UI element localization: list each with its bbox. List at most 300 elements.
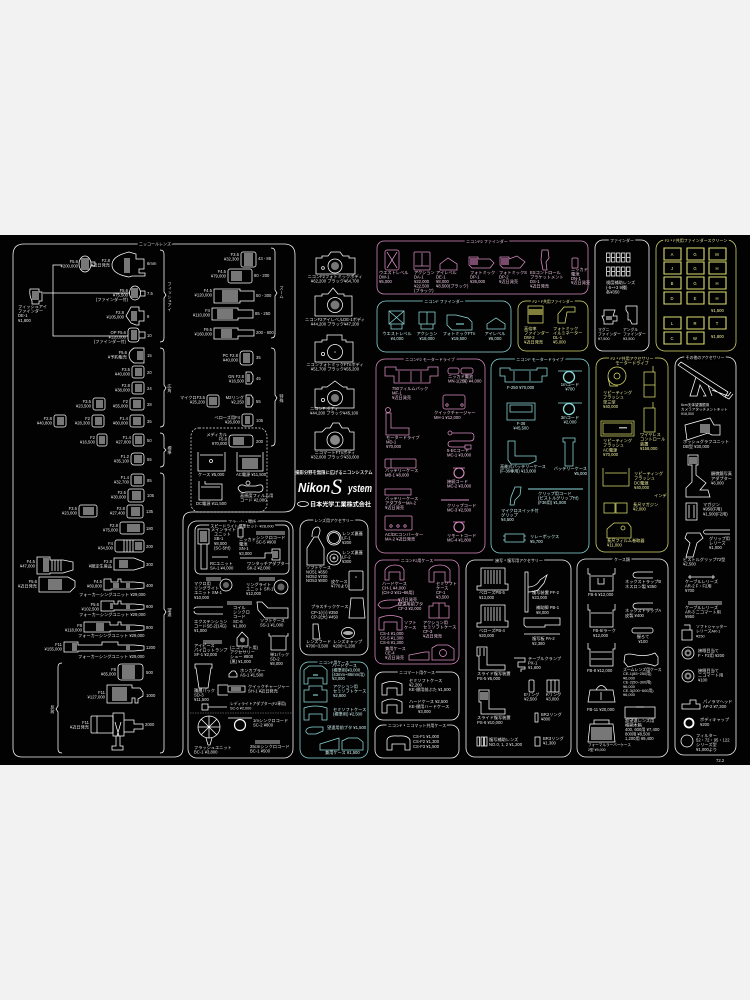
telephoto wooden case xyxy=(625,707,660,742)
battery adapter MA-2: バッテリーケース xyxy=(385,496,418,501)
screen grid: E xyxy=(694,296,697,301)
battery pack SD-3: ¥11,500 xyxy=(194,697,209,702)
lens: 300mm: ¥限定生産品 xyxy=(89,563,112,570)
hard case: ハードケース ¥2,500 xyxy=(409,699,448,704)
lens: 6mm F2.8: 6mm xyxy=(147,261,157,266)
coil sync cord: コード xyxy=(233,614,246,619)
slide copier PS-6 xyxy=(477,690,511,725)
magnifier finder xyxy=(598,310,621,341)
panel: camera bodies xyxy=(295,252,373,508)
finder photomic illuminator xyxy=(553,307,582,344)
finder DA-1: ¥22,000 xyxy=(414,279,430,284)
rear cap LF-1: LF-1 xyxy=(342,536,351,541)
relay box xyxy=(503,533,559,544)
grip cord: (F36用) ¥1,800 xyxy=(538,500,567,506)
NiCd battery xyxy=(238,528,256,556)
lens: 180mm: 180 xyxy=(146,526,154,531)
panel: flash accessories: フラッシュ関係 xyxy=(228,518,256,524)
former case: 2型 ¥9,000 xyxy=(588,747,606,752)
repeating flash AC: リピーティング xyxy=(603,438,632,443)
lens: medical 200mm: 200 xyxy=(256,439,264,444)
hard case xyxy=(382,698,449,714)
lens: 8mm F2.8: F2.8 xyxy=(116,310,124,315)
cable release AR-3: ¥950 xyxy=(685,614,695,619)
3m cord: ¥2,000 xyxy=(564,420,577,425)
screen grid: A xyxy=(671,252,674,257)
lens: 50mm F2 xyxy=(80,434,107,446)
cord MC-1 xyxy=(447,431,474,458)
panel: Nikon F2 finders xyxy=(377,238,590,294)
label index: インデ xyxy=(654,492,667,499)
K ring: Kリング xyxy=(546,692,561,697)
battery MN-1 xyxy=(448,368,482,384)
front cover CF-3: 望遠用前ブタ xyxy=(398,600,423,608)
main light unit: (SC-5付) xyxy=(214,544,231,551)
lens hood xyxy=(306,624,331,649)
lens: 6mm F2.8: F2.8 xyxy=(102,258,110,263)
lens: PC 35mm: 35 xyxy=(256,355,261,360)
quick charger MH-1: クイックチャージャー xyxy=(434,410,476,415)
NiCd battery DN-1 xyxy=(571,258,590,286)
panel: Nikon F cases: ニコンF用ケース xyxy=(319,659,349,665)
brace: fisheye group xyxy=(160,250,172,342)
lens: 85mm: F1.4 xyxy=(121,475,129,480)
soft case CS xyxy=(379,616,417,645)
camera: Nikon F2 Photomic xyxy=(308,252,362,285)
brace: special group xyxy=(271,348,284,446)
rear cap LF-2: レンズ裏蓋 xyxy=(342,550,363,555)
neck strap A: 皮製 ¥400 xyxy=(625,612,645,619)
3m cord: 3mコード xyxy=(561,415,579,420)
camera: Nikon F2 eye level: ニコンF2アイレベルDE-1ボディ xyxy=(305,317,365,322)
magazine: ¥1,500(F2用) xyxy=(703,511,728,517)
1m cord: ¥700 xyxy=(565,387,575,392)
copy board PA-2: ¥2,380 xyxy=(532,641,545,646)
lens: zoom 80-200: 80 - 200 xyxy=(254,273,270,278)
lens: 500mm reflex: 500 xyxy=(146,670,154,675)
lens: 200mm F4.5 left: ¥47,000 xyxy=(20,564,36,569)
camera: Nikomat FTn: ニコマートFTnボディ xyxy=(315,450,355,455)
battery pack SD-2: ¥8,000 xyxy=(270,661,283,666)
lens: 200mm: 200 xyxy=(146,544,154,549)
close-up lenses xyxy=(477,736,523,747)
finder DW-1: DW-1 xyxy=(379,274,390,280)
finder DA-1 xyxy=(414,252,435,294)
heading: F2・F共用アクセサリー xyxy=(611,355,653,361)
battery adapter MA-2 xyxy=(385,489,418,511)
semi soft case: セミソフトケース xyxy=(333,707,366,712)
finder eye level: ¥6,000 xyxy=(489,336,502,341)
finder DP-1: DP-1 xyxy=(470,274,480,280)
lens: 105mm xyxy=(111,489,155,502)
lens: 300mm xyxy=(89,558,154,570)
camera: Nikon F body xyxy=(310,381,359,417)
panel: zoom and special lenses xyxy=(180,248,284,512)
NiCd battery: ニッカド xyxy=(239,537,256,542)
copy stand PF-2 xyxy=(525,572,560,615)
finder DE-1: ¥8,000 xyxy=(436,279,449,284)
battery MN-1: MN-1(2個) ¥4,000 xyxy=(448,378,482,384)
rear cap LF-2: ¥300 xyxy=(342,559,352,564)
semi soft case CF-1 xyxy=(429,565,457,600)
diopter lenses grid: (-5~+3 9種) xyxy=(606,284,628,291)
NiCd battery: ¥3,000 xyxy=(239,551,252,556)
hard case: ハードケース xyxy=(332,663,357,668)
action semi soft case xyxy=(304,684,366,702)
diopter lenses grid: 視度補助レンズ xyxy=(606,280,635,285)
microscope adapter: ¥6,000 xyxy=(711,481,724,486)
screen grid: L xyxy=(671,321,674,326)
battery case: バッテリーケース xyxy=(554,466,587,471)
panel: Nikomat cases: ニコマート用ケース xyxy=(399,669,435,675)
eyepiece pilot lamp: SF-1 ¥2,000 xyxy=(194,652,218,657)
magnifier finder: ファインダー xyxy=(598,332,621,336)
action semi soft case text: セミソフトケース xyxy=(423,624,456,630)
lens: 10mm OP F5.6: (ファインダー付) xyxy=(94,338,127,345)
finder DW-1: ウエストレベル xyxy=(379,270,408,275)
finder waist level xyxy=(382,311,412,341)
control DS-1: ブラケットメント xyxy=(530,274,564,280)
table clamp xyxy=(514,655,562,672)
brace: zoom group: ズーム xyxy=(280,285,284,299)
pistol grip xyxy=(683,533,725,567)
panel: Nikon F2 finders: ニコンF2 ファインダー xyxy=(466,238,508,244)
long magazine: ¥2,000 xyxy=(633,507,646,512)
panel: focusing screens xyxy=(656,237,736,351)
copy board PA-2: 複写板 PA-2 xyxy=(532,636,555,641)
accessory shoe: (ニコマート用) xyxy=(230,645,258,650)
finder DA-1: DA-1 xyxy=(414,274,424,280)
lens: 400mm xyxy=(79,579,154,598)
BR2 ring xyxy=(535,711,562,722)
NiCd battery DN-1: DN-1 xyxy=(571,276,581,281)
soft shutter release: レリーズAR-1 xyxy=(696,629,720,634)
lens: zoom 50-300 xyxy=(195,288,272,303)
lens: 24mm: ¥38,000 xyxy=(115,388,131,393)
one touch adapter xyxy=(240,549,289,571)
cord MC-1: MC-1 ¥3,000 xyxy=(447,452,472,458)
combination case CE-4: ¥近日発売 xyxy=(385,654,404,661)
flash unit BC-1: フラッシュユニット xyxy=(194,745,232,750)
lens: medical 200mm: F5.6 xyxy=(219,437,228,442)
hand strap xyxy=(632,628,653,644)
table clamp: テーブルクランプ xyxy=(528,656,561,661)
lens: 1200mm: フォーカーシングユニット ¥29,000 xyxy=(78,653,145,660)
flash unit BC-1 xyxy=(194,716,232,755)
RC unit: SA-1 ¥4,000 xyxy=(210,566,234,571)
micro switch grip xyxy=(501,487,539,522)
lens: 400mm: 400 xyxy=(146,583,154,588)
lens: M2 ring 55mm: ¥2,250 xyxy=(231,400,245,405)
lens: 50mm F1.4: F1.4 xyxy=(123,435,131,440)
eye cup F: F・F2用 ¥200 xyxy=(698,653,725,659)
camera: Nikon Photomic FTn: ¥51,700 ブラック¥55,200 xyxy=(311,366,360,373)
soft case CS: CS-4 ¥1,000 xyxy=(380,631,404,636)
accessory shoe xyxy=(230,632,259,665)
panorama head: パノラマヘッド xyxy=(703,699,732,704)
ready light adapter: SC-6 ¥2,000 xyxy=(230,707,251,711)
extension cord: エクステンション xyxy=(194,619,227,624)
lens: 15mm xyxy=(108,348,152,363)
BR3 ring: BR3リング xyxy=(543,736,564,741)
lens: 35mm F1.4: F1.4 xyxy=(120,416,128,421)
brace: telephoto group: 望遠 xyxy=(167,608,172,618)
cord MC-1: 5-ECコード xyxy=(447,448,469,453)
finder DA-1: アクション xyxy=(414,270,435,275)
screen grid: H xyxy=(715,296,719,301)
camera: Nikon F2 eye level: ¥44,200 ブラック¥47,200 xyxy=(311,321,360,328)
semi soft case CF-1: ¥3,500 xyxy=(436,594,449,600)
screen prices: ¥1,800 xyxy=(711,334,724,339)
lens: zoom 50-300: ¥120,000 xyxy=(195,293,213,298)
rear cap LF-2: LF-2 xyxy=(342,555,351,560)
neck strap B xyxy=(625,572,661,590)
action semi soft case: ¥2,800 xyxy=(333,693,346,698)
cable release AR-2: AR-2 F・F2用 xyxy=(685,584,712,590)
fisheye finder with connector lines: フィッシュアイ xyxy=(18,304,47,309)
motor drive F-36: ¥45,500 xyxy=(513,426,529,431)
motor drive F-36: F-36 xyxy=(517,421,525,426)
repeating flash DC: DC電源 xyxy=(634,479,649,486)
repeating flash battery xyxy=(603,367,632,409)
lens: 400mm: ¥69,800 xyxy=(87,584,103,589)
finder DE-1 xyxy=(436,258,469,290)
body cap: ¥200 xyxy=(700,722,710,727)
AC/DC converter xyxy=(385,516,423,542)
repeating flash DC: フラッシュ xyxy=(634,476,655,482)
fisheye finder with connector lines: ¥1,800 xyxy=(18,318,31,323)
lens: 24mm: 24 xyxy=(147,386,152,391)
panel: speedlight standard set: スピードライト標準セット ¥28,000 xyxy=(210,522,275,528)
close-up lenses: 複写補助レンズ xyxy=(489,737,518,742)
lens: 50mm F1.4: ¥27,800 xyxy=(116,440,132,445)
relay box: リレーボックス xyxy=(530,534,559,539)
finder DE-1: ¥8,500(ブラック) xyxy=(436,282,469,290)
one touch adapter: ワンタッチアダプター xyxy=(247,561,289,566)
screen grid: M xyxy=(715,252,719,257)
control DS-1: ESコントロール xyxy=(530,270,561,275)
soft case SS-1: SS-1 ¥1,000 xyxy=(260,623,284,628)
panel: other accessories xyxy=(675,355,736,755)
magazine: ¥950(F用) xyxy=(703,507,722,513)
connecting cord MC-2: MC-2 ¥3,000 xyxy=(447,484,472,488)
repeating flash AC: フラッシュ xyxy=(603,443,624,449)
lens: 600mm: ¥102,500 xyxy=(82,607,100,612)
repeating flash AC: ¥70,000 xyxy=(603,452,619,457)
lens: 8mm F2.8 xyxy=(107,307,150,325)
control DS-1: ¥近日発売 xyxy=(530,282,549,290)
main light unit: ¥8,000 xyxy=(214,541,227,546)
lens cap: レンズキャップ xyxy=(333,639,362,644)
panel: focusing screens: F2・F共用ファインダースクリーン xyxy=(665,237,727,243)
extension cord: コードSE-2(14G) xyxy=(194,624,227,629)
zoom lens case: ズームレンズ用ケース xyxy=(623,667,662,672)
semi soft case CF-1: ケース xyxy=(436,584,448,590)
lens: 35mm F1.4: ¥60,000 xyxy=(113,421,129,426)
lens: 135mm: ¥27,400 xyxy=(110,511,126,516)
finder eye level: アイレベル xyxy=(485,331,505,336)
motor drive MD-1: MD-1 xyxy=(386,440,397,444)
control DS-1: DS-1 xyxy=(530,279,540,284)
ready light adapter: レディライトアダプター(F2専用) xyxy=(230,702,286,706)
BR2 ring: ¥800 xyxy=(541,717,551,722)
camera: Nikon Photomic FTn xyxy=(306,335,364,373)
lens: 800mm xyxy=(65,622,154,639)
lens: 35mm F2.8: F2.8 xyxy=(44,416,52,421)
telephoto wooden case: 400, 600用 ¥7,400 xyxy=(625,727,660,733)
angle finder: アングル xyxy=(623,328,638,332)
bellows PB-4: ベローズPB-4 xyxy=(479,628,505,633)
panel: Nikon F motor drive: ニコンF モータードライブ xyxy=(516,356,564,362)
filter: ¥1,000より xyxy=(696,747,717,753)
case FB-8 xyxy=(587,643,615,673)
lens: 24mm xyxy=(115,382,152,394)
lens: 6mm fisheye F5.6: ¥200,000 xyxy=(61,264,79,269)
lens: 135mm: F2.8 xyxy=(117,506,125,511)
lens: 6mm fisheye F5.6: F5.6 xyxy=(70,259,78,264)
1m sync cord: 1mシンクロコード xyxy=(253,718,288,723)
lens: 800mm: 800 xyxy=(146,625,154,630)
lens: 50mm F1.4 xyxy=(116,434,152,446)
cable release AR-3: ケーブルレリーズ xyxy=(685,605,718,610)
battery adapter MA-2: アダプターMA-2 xyxy=(385,500,417,506)
combination case CE-4: CE-4 xyxy=(385,650,395,656)
25cm sync cord: BC-1 ¥500 xyxy=(250,749,271,754)
lens: medical 200mm xyxy=(206,431,264,447)
lens: 10mm OP F5.6: 10 xyxy=(147,333,152,338)
lens: micro F3.5: ¥25,200 xyxy=(190,400,206,405)
soft case CS: CS-5 ¥1,300 xyxy=(380,636,404,640)
lens: zoom 43-86: ¥32,300 xyxy=(224,257,240,262)
1m cord xyxy=(558,371,582,392)
magazine xyxy=(686,501,728,520)
ring light unit: ¥12,000 xyxy=(246,591,262,596)
lens: micro F3.5 xyxy=(180,395,219,407)
front cover CF-3: ¥近日発売 xyxy=(398,597,417,602)
brace: zoom group xyxy=(271,248,284,338)
lens: 105mm: F2.5 xyxy=(118,490,126,495)
main light unit: ユニット xyxy=(214,532,231,537)
microscope adapter: アダプター xyxy=(711,475,732,482)
lens: zoom 85-250: 85 - 250 xyxy=(255,311,271,316)
ring light unit: リングライト xyxy=(246,582,271,587)
film back MF-1: 750フィルムバック xyxy=(392,386,428,391)
finder action xyxy=(417,312,437,341)
semi soft case: セミソフトケース xyxy=(409,678,442,683)
combination case CE-4: 兼用ケース xyxy=(385,646,406,651)
semi soft case: KE-標用前ぶた ¥1,500 xyxy=(409,686,452,693)
pistol grip: ピストルグリップ72型 xyxy=(683,557,725,562)
finder DW-1: ¥5,000 xyxy=(379,279,392,284)
semi soft case xyxy=(304,706,366,720)
lens: 35mm F1.4 xyxy=(113,415,152,427)
lens: 1200mm: 1200 xyxy=(146,645,156,650)
case FB-11 xyxy=(587,686,615,712)
grip cord xyxy=(528,489,583,506)
bellows PB-4 xyxy=(477,605,508,638)
finder DW-2: ファインダー xyxy=(524,330,549,336)
clip cord MC-3 xyxy=(441,500,476,512)
fisheye finder with connector lines xyxy=(18,265,130,336)
plastic case xyxy=(311,598,365,621)
hard case: ¥3,000 xyxy=(418,709,431,714)
lens: 105mm F3.5: ¥23,000 xyxy=(62,511,78,516)
lens: 105mm: 105 xyxy=(147,493,155,498)
high capacity battery case: (F-36専用) ¥13,000 xyxy=(500,468,537,474)
finder DW-2: 高倍率 xyxy=(524,326,537,331)
coupler AS-1 xyxy=(229,668,265,678)
case CS-F xyxy=(387,734,440,750)
micro flash unit: ホッシュグラフユニット xyxy=(683,439,729,444)
lens: 15mm: F5.6 xyxy=(119,350,127,355)
rear cap LF-1: ¥200 xyxy=(342,540,352,545)
soft pouch xyxy=(306,527,331,583)
zoom lens case: CE-1(85~250用) xyxy=(623,671,652,676)
finder DW-2: DW-2 xyxy=(524,335,535,340)
film back MF-1: MF-1 xyxy=(392,390,402,396)
panel: Nikon F2 motor drive: ニコンF2 モータードライブ xyxy=(405,356,455,362)
finder photomic illuminator: イルミネーター xyxy=(553,330,582,336)
lens: bellows 105mm xyxy=(214,414,264,426)
film winder xyxy=(607,523,645,548)
E ring: Eリング xyxy=(524,692,539,697)
lens: 28mm F3.5: F3.5 xyxy=(83,399,91,404)
finder photomic illuminator: フォトミック xyxy=(553,326,578,331)
sync cord SC-5: SC-5 ¥900 xyxy=(256,540,277,545)
plastic case: CP-1(小) ¥350 xyxy=(311,609,339,616)
lens: zoom 43-86: F3.5 xyxy=(231,252,239,257)
angle finder xyxy=(623,306,646,341)
panorama head xyxy=(682,699,732,709)
case CS-F: CS-F2 ¥1,300 xyxy=(413,739,440,744)
film winder: 長尺フィルム巻取器 xyxy=(607,538,645,543)
panel: Nikon F2 cases xyxy=(375,557,459,664)
lens: 600mm: 600 xyxy=(146,604,154,609)
high capacity battery case: 高能式バッテリーケース xyxy=(500,464,546,469)
finder DA-1: ¥22,500 xyxy=(414,284,430,288)
lens: 85mm: ¥32,700 xyxy=(114,480,130,485)
lens: 300mm F5.6 left xyxy=(18,577,75,592)
lens: zoom 80-200 xyxy=(211,269,270,283)
lens: PC 35mm xyxy=(223,351,261,365)
tagline: 撮影分野を無限に広げるニコンシステム xyxy=(295,469,373,476)
lens: 28mm F3.5: ¥23,500 xyxy=(76,404,92,409)
repeating flash DC xyxy=(603,468,663,490)
heading xyxy=(611,355,653,366)
quick charger SH-1 xyxy=(218,684,290,695)
hard case: (43mm~86mm用) xyxy=(332,672,365,678)
telephoto wooden case: 格納木箱 xyxy=(625,722,642,728)
accessory shoe: (黒) ¥1,000 xyxy=(230,659,252,665)
K ring: ¥3,000 xyxy=(546,697,559,702)
NiCd battery DN-1: ニッカド xyxy=(571,267,588,272)
finder photomic illuminator: DL-1 xyxy=(553,335,563,340)
micro switch grip: マイクロスイッチ付 xyxy=(501,508,539,513)
panel: Nikon F2 cases: ニコンF2用ケース xyxy=(401,557,433,563)
soft case CS: CS-6 ¥1,300 xyxy=(380,640,404,645)
accessory shoe: アクセサリー xyxy=(230,650,255,656)
lens: 28mm F2: 28 xyxy=(147,402,152,407)
lens: zoom 200-600: ¥160,000 xyxy=(195,332,213,337)
film back MF-1 xyxy=(385,367,438,401)
hand strap: ¥100 xyxy=(638,639,648,644)
zoom lens case: ¥6,000 xyxy=(623,684,636,689)
soft pouch: NO52 ¥700 xyxy=(306,574,328,579)
grip release xyxy=(704,530,730,550)
action semi soft case: アクション用 xyxy=(333,684,358,689)
action semi soft case text: ¥近日発売 xyxy=(423,632,442,640)
repeating flash DC: ¥40,000 xyxy=(634,485,650,490)
